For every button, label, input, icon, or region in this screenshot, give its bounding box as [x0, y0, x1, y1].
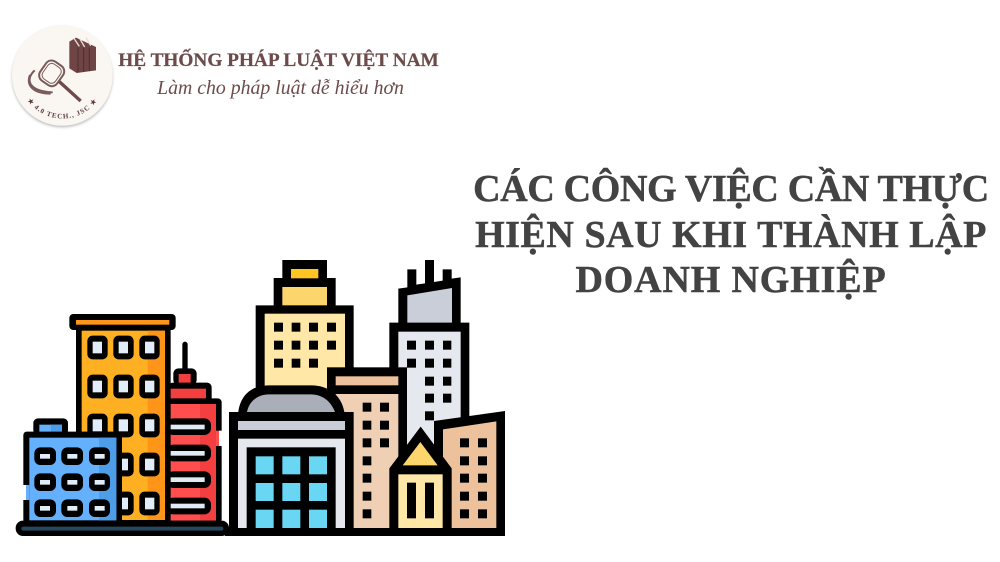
beige tower	[327, 367, 407, 532]
dome building	[229, 385, 354, 536]
title: CÁC CÔNG VIỆC CẦN THỰC	[473, 168, 989, 210]
orange tower	[69, 314, 176, 523]
site name heading: HỆ THỐNG PHÁP LUẬT VIỆT NAM	[118, 50, 439, 71]
red tower	[167, 342, 222, 523]
badge text: ★ 4.0 TECH., JSC ★	[28, 98, 96, 119]
yellow tower	[256, 260, 354, 392]
ground bar	[16, 521, 229, 536]
icon: gavel	[29, 58, 81, 101]
base line	[225, 528, 505, 536]
blue building	[23, 418, 122, 523]
icon: books	[69, 38, 96, 73]
logo badge	[10, 25, 114, 128]
icon: left building group	[16, 314, 229, 536]
title	[473, 166, 989, 301]
slanted tan building	[434, 411, 505, 536]
small gabled house	[389, 427, 452, 535]
icon: right building group	[225, 260, 505, 536]
title: HIỆN SAU KHI THÀNH LẬP	[475, 214, 987, 256]
title: DOANH NGHIỆP	[575, 259, 887, 301]
grey tower	[389, 260, 469, 445]
tagline: Làm cho pháp luật dễ hiểu hơn	[157, 77, 404, 99]
